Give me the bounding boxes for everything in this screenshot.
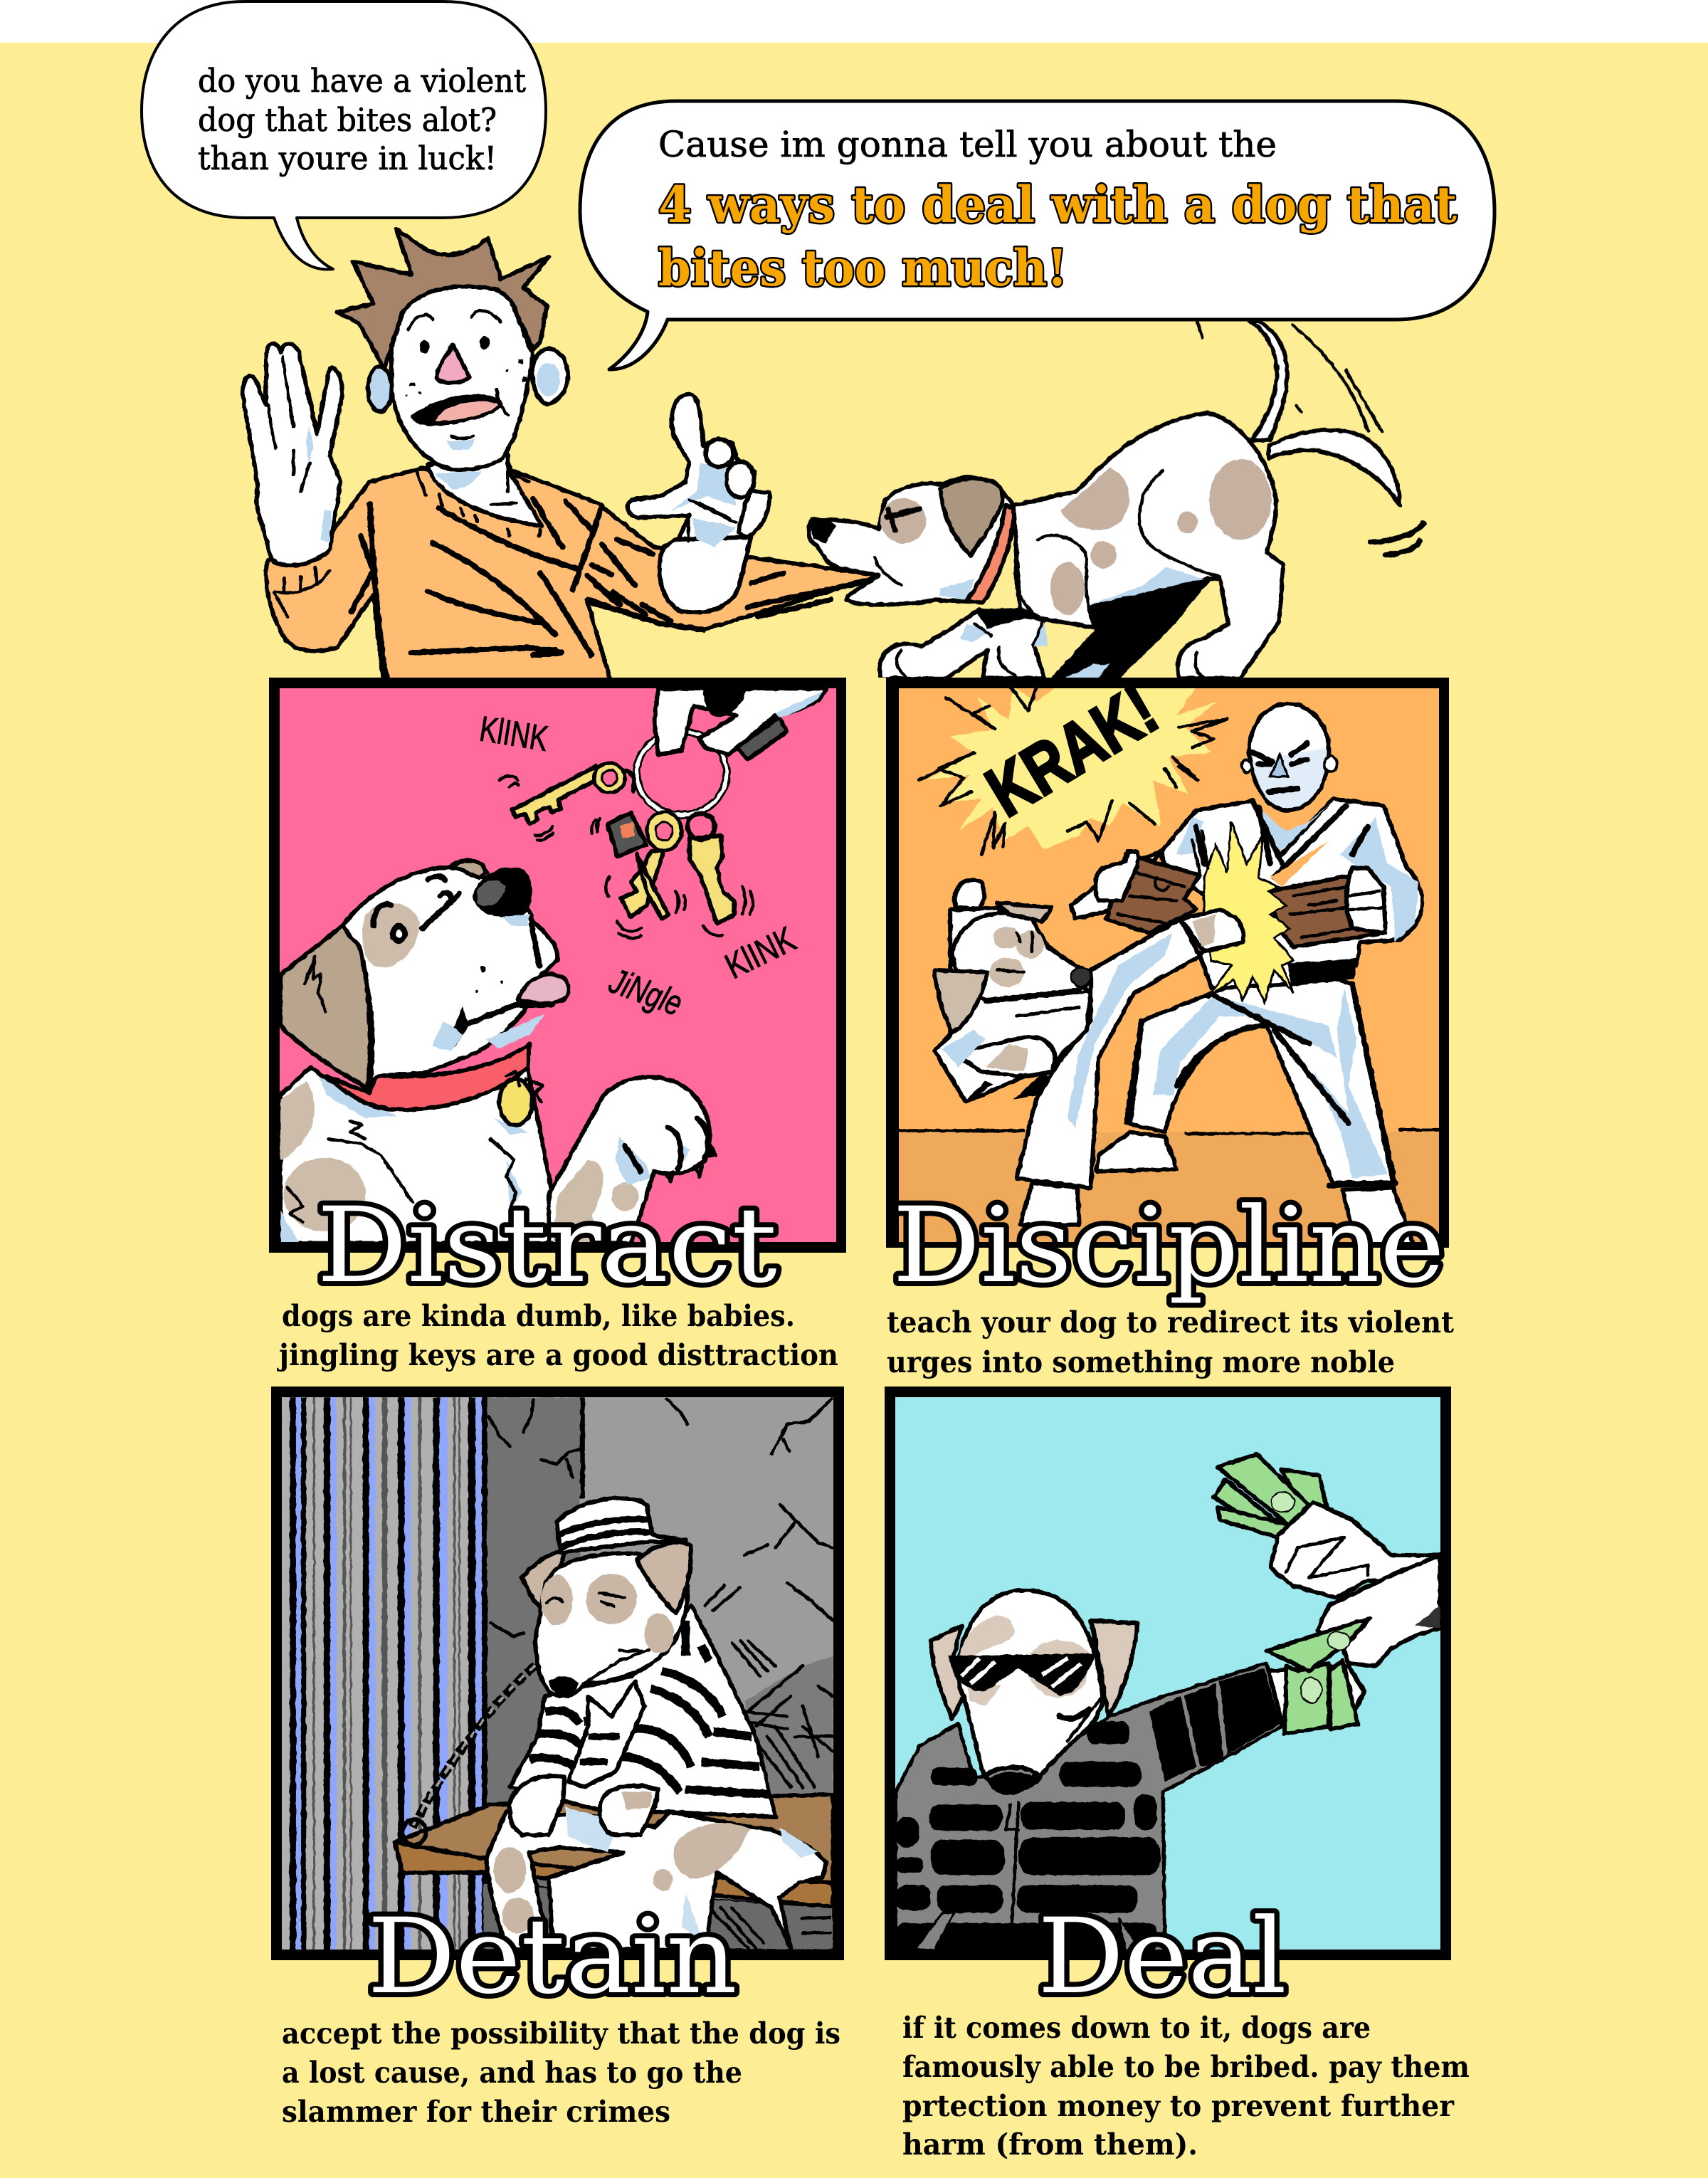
key: middle xyxy=(621,850,664,917)
dog: paw xyxy=(549,1077,710,1243)
dog: torso xyxy=(510,1606,776,1817)
dog: spots xyxy=(1060,468,1129,530)
man: nose xyxy=(436,344,470,383)
floor xyxy=(895,1132,1442,1253)
man: face xyxy=(1253,743,1307,791)
speech bubble: headline: 4 ways to deal with a dog that xyxy=(658,175,1457,234)
sound word: krak: KRAK! xyxy=(974,670,1171,832)
dog: hind paw mark xyxy=(1196,653,1203,678)
hand: top xyxy=(1270,1503,1440,1598)
dog: brow patch xyxy=(451,861,487,878)
money: top xyxy=(1213,1480,1309,1540)
dog: body xyxy=(934,908,1091,1102)
speech bubble: intro question: than youre in luck! xyxy=(198,140,497,177)
dog: arm xyxy=(954,1037,1055,1076)
caption: distract: jingling keys are a good disttraction xyxy=(276,1338,838,1372)
dog: right ear xyxy=(1091,1621,1137,1716)
man: right hand xyxy=(660,537,751,613)
panel: detain xyxy=(271,1387,844,1960)
board: left xyxy=(1107,854,1200,933)
man: hands xyxy=(1095,852,1137,900)
panel frame xyxy=(271,1387,844,1960)
dog: nose and eyes xyxy=(1071,967,1091,987)
dog: fur marks xyxy=(288,1120,516,1222)
dog: front legs xyxy=(880,610,1044,678)
key ring xyxy=(637,732,727,815)
dog: head xyxy=(809,478,1011,605)
key: right xyxy=(690,836,734,924)
sound word: klink: KlINK xyxy=(719,919,801,987)
man: face xyxy=(391,286,533,470)
dog: kicking leg xyxy=(1016,919,1200,1188)
dog: belt xyxy=(966,1072,1048,1102)
burst: ink zigzags xyxy=(919,688,1228,854)
panel: distract xyxy=(269,678,846,1253)
panel frame xyxy=(886,678,1449,1248)
dog: stripes xyxy=(529,1621,769,1794)
caption: distract xyxy=(276,1299,838,1372)
dog xyxy=(809,413,1423,678)
dog: mouth xyxy=(469,1005,553,1042)
board: right xyxy=(1270,873,1383,947)
dog: nose xyxy=(473,867,532,917)
dog: right ear xyxy=(637,1542,692,1613)
bench: top xyxy=(395,1794,833,1888)
dog: nose xyxy=(984,1765,1040,1795)
caption: deal: if it comes down to it, dogs are xyxy=(902,2011,1371,2045)
panel: discipline xyxy=(886,670,1449,1253)
man: torso xyxy=(1161,799,1422,989)
panel frame xyxy=(269,678,846,1253)
wall: dark section xyxy=(487,1397,580,1952)
key motion marks xyxy=(500,776,753,939)
wall: cracks xyxy=(488,1399,833,1637)
man: neck xyxy=(428,448,542,526)
man: ears xyxy=(368,367,392,411)
dog: smile xyxy=(1060,1709,1089,1718)
prison bars xyxy=(282,1397,487,1952)
dog: jacket xyxy=(895,1663,1282,1953)
caption: discipline: teach your dog to redirect its violent xyxy=(887,1305,1454,1340)
speech bubble: intro question: dog that bites alot? xyxy=(198,101,497,139)
speech bubble: headline xyxy=(580,101,1494,369)
dog: ear xyxy=(940,478,1003,555)
caption: deal xyxy=(902,2011,1470,2162)
dog: tail up xyxy=(1198,321,1382,440)
man: back arm xyxy=(1071,852,1161,919)
caption: detain xyxy=(282,2016,840,2129)
caption: discipline: urges into something more noble xyxy=(887,1345,1395,1379)
dog: head xyxy=(959,1590,1102,1789)
panel frame xyxy=(885,1387,1451,1960)
burst: impact xyxy=(1204,822,1294,1002)
caption: deal: harm (from them). xyxy=(902,2127,1198,2162)
dog: collar shirt xyxy=(569,1681,645,1787)
dog: head xyxy=(342,868,557,1085)
man: sweater xyxy=(266,468,882,689)
jacket: pockets xyxy=(915,1913,1142,1950)
dog: nose xyxy=(809,517,836,543)
caption: discipline xyxy=(887,1305,1454,1379)
dog: body lines xyxy=(1015,471,1220,628)
man: head xyxy=(1249,704,1329,810)
man: eyes and brows xyxy=(408,311,500,354)
bench: front xyxy=(395,1842,833,1907)
money: bottom xyxy=(1284,1663,1329,1734)
dog: hat xyxy=(557,1498,685,1552)
dog: tag xyxy=(500,1072,543,1125)
dog: foot xyxy=(1181,910,1244,952)
dog: head xyxy=(952,913,1087,1000)
caption: distract: dogs are kinda dumb, like babies. xyxy=(282,1299,795,1333)
dog: tongue xyxy=(517,974,569,1004)
man: left hand xyxy=(243,343,342,565)
dog: eye patch xyxy=(362,903,419,967)
dog: paws xyxy=(510,1776,564,1835)
man: hair xyxy=(337,229,549,369)
panel: deal xyxy=(885,1387,1451,1960)
dog: collar xyxy=(327,1044,529,1110)
dog: head xyxy=(536,1553,687,1697)
caption: detain: accept the possibility that the dog is xyxy=(282,2016,840,2051)
man xyxy=(243,229,882,689)
dog: chest xyxy=(280,1067,553,1243)
title: distract: Distract xyxy=(317,1185,777,1306)
dog: raised paw xyxy=(955,880,984,910)
dog: ear left xyxy=(522,1552,564,1611)
dog: eye and mouth xyxy=(887,509,919,530)
dog: collar xyxy=(966,505,1014,603)
speech bubble: intro question xyxy=(142,1,546,269)
man: legs xyxy=(1126,965,1395,1183)
dog: body xyxy=(1013,413,1283,678)
speech bubble: headline: Cause im gonna tell you about the xyxy=(658,124,1277,165)
dog: left ear xyxy=(931,1626,964,1719)
hand holding keys xyxy=(654,688,826,754)
dog: sunglasses xyxy=(948,1653,1095,1696)
sound word: jingle: JiNgle xyxy=(604,960,687,1024)
man: sweater folds xyxy=(273,456,860,689)
key fob xyxy=(608,813,647,856)
under bench hatching xyxy=(483,1883,833,1950)
dog: tail wag xyxy=(1269,430,1400,505)
jacket: quilting bands xyxy=(895,1668,1280,1953)
man: freckles xyxy=(405,359,527,396)
dog: muzzle lines xyxy=(374,876,539,965)
man: front foot xyxy=(1342,1188,1415,1248)
man: back foot xyxy=(1097,1132,1176,1172)
dog: ear xyxy=(934,970,987,1033)
speech bubble: headline: bites too much! xyxy=(658,238,1068,298)
caption: detain: slammer for their crimes xyxy=(282,2095,670,2129)
dog: body spots xyxy=(280,1081,315,1160)
dog: ear fur xyxy=(305,956,326,1011)
caption: deal: prtection money to prevent further xyxy=(902,2089,1455,2123)
dog: spots on legs xyxy=(673,1823,750,1878)
dog: legs xyxy=(487,1812,826,1950)
dog hand xyxy=(1268,1666,1364,1721)
burst: krak background xyxy=(927,688,1218,850)
speech bubble: intro question: do you have a violent xyxy=(198,62,526,100)
chain xyxy=(412,1666,535,1827)
title: detain: Detain xyxy=(367,1896,737,2017)
caption: deal: famously able to be bribed. pay them xyxy=(902,2050,1470,2084)
dog: ear xyxy=(280,926,370,1088)
dog: standing foot xyxy=(1021,1183,1079,1225)
hand: bottom xyxy=(1317,1555,1440,1666)
top scene: man and dog xyxy=(243,229,1423,689)
man: belt xyxy=(1290,961,1354,984)
title: deal: Deal xyxy=(1038,1896,1287,2017)
dog: head spots xyxy=(960,1616,1089,1706)
wall: hatching xyxy=(744,1656,833,1797)
dog: eye patches xyxy=(586,1574,637,1624)
title: discipline: Discipline xyxy=(892,1185,1445,1306)
caption: detain: a lost cause, and has to go the xyxy=(282,2056,742,2090)
dog: belly shadow xyxy=(1053,582,1208,678)
sound word: klink: KlINK xyxy=(477,709,551,759)
dog: nose xyxy=(549,1676,579,1695)
key: big xyxy=(512,763,634,824)
man: mouth xyxy=(413,396,500,424)
